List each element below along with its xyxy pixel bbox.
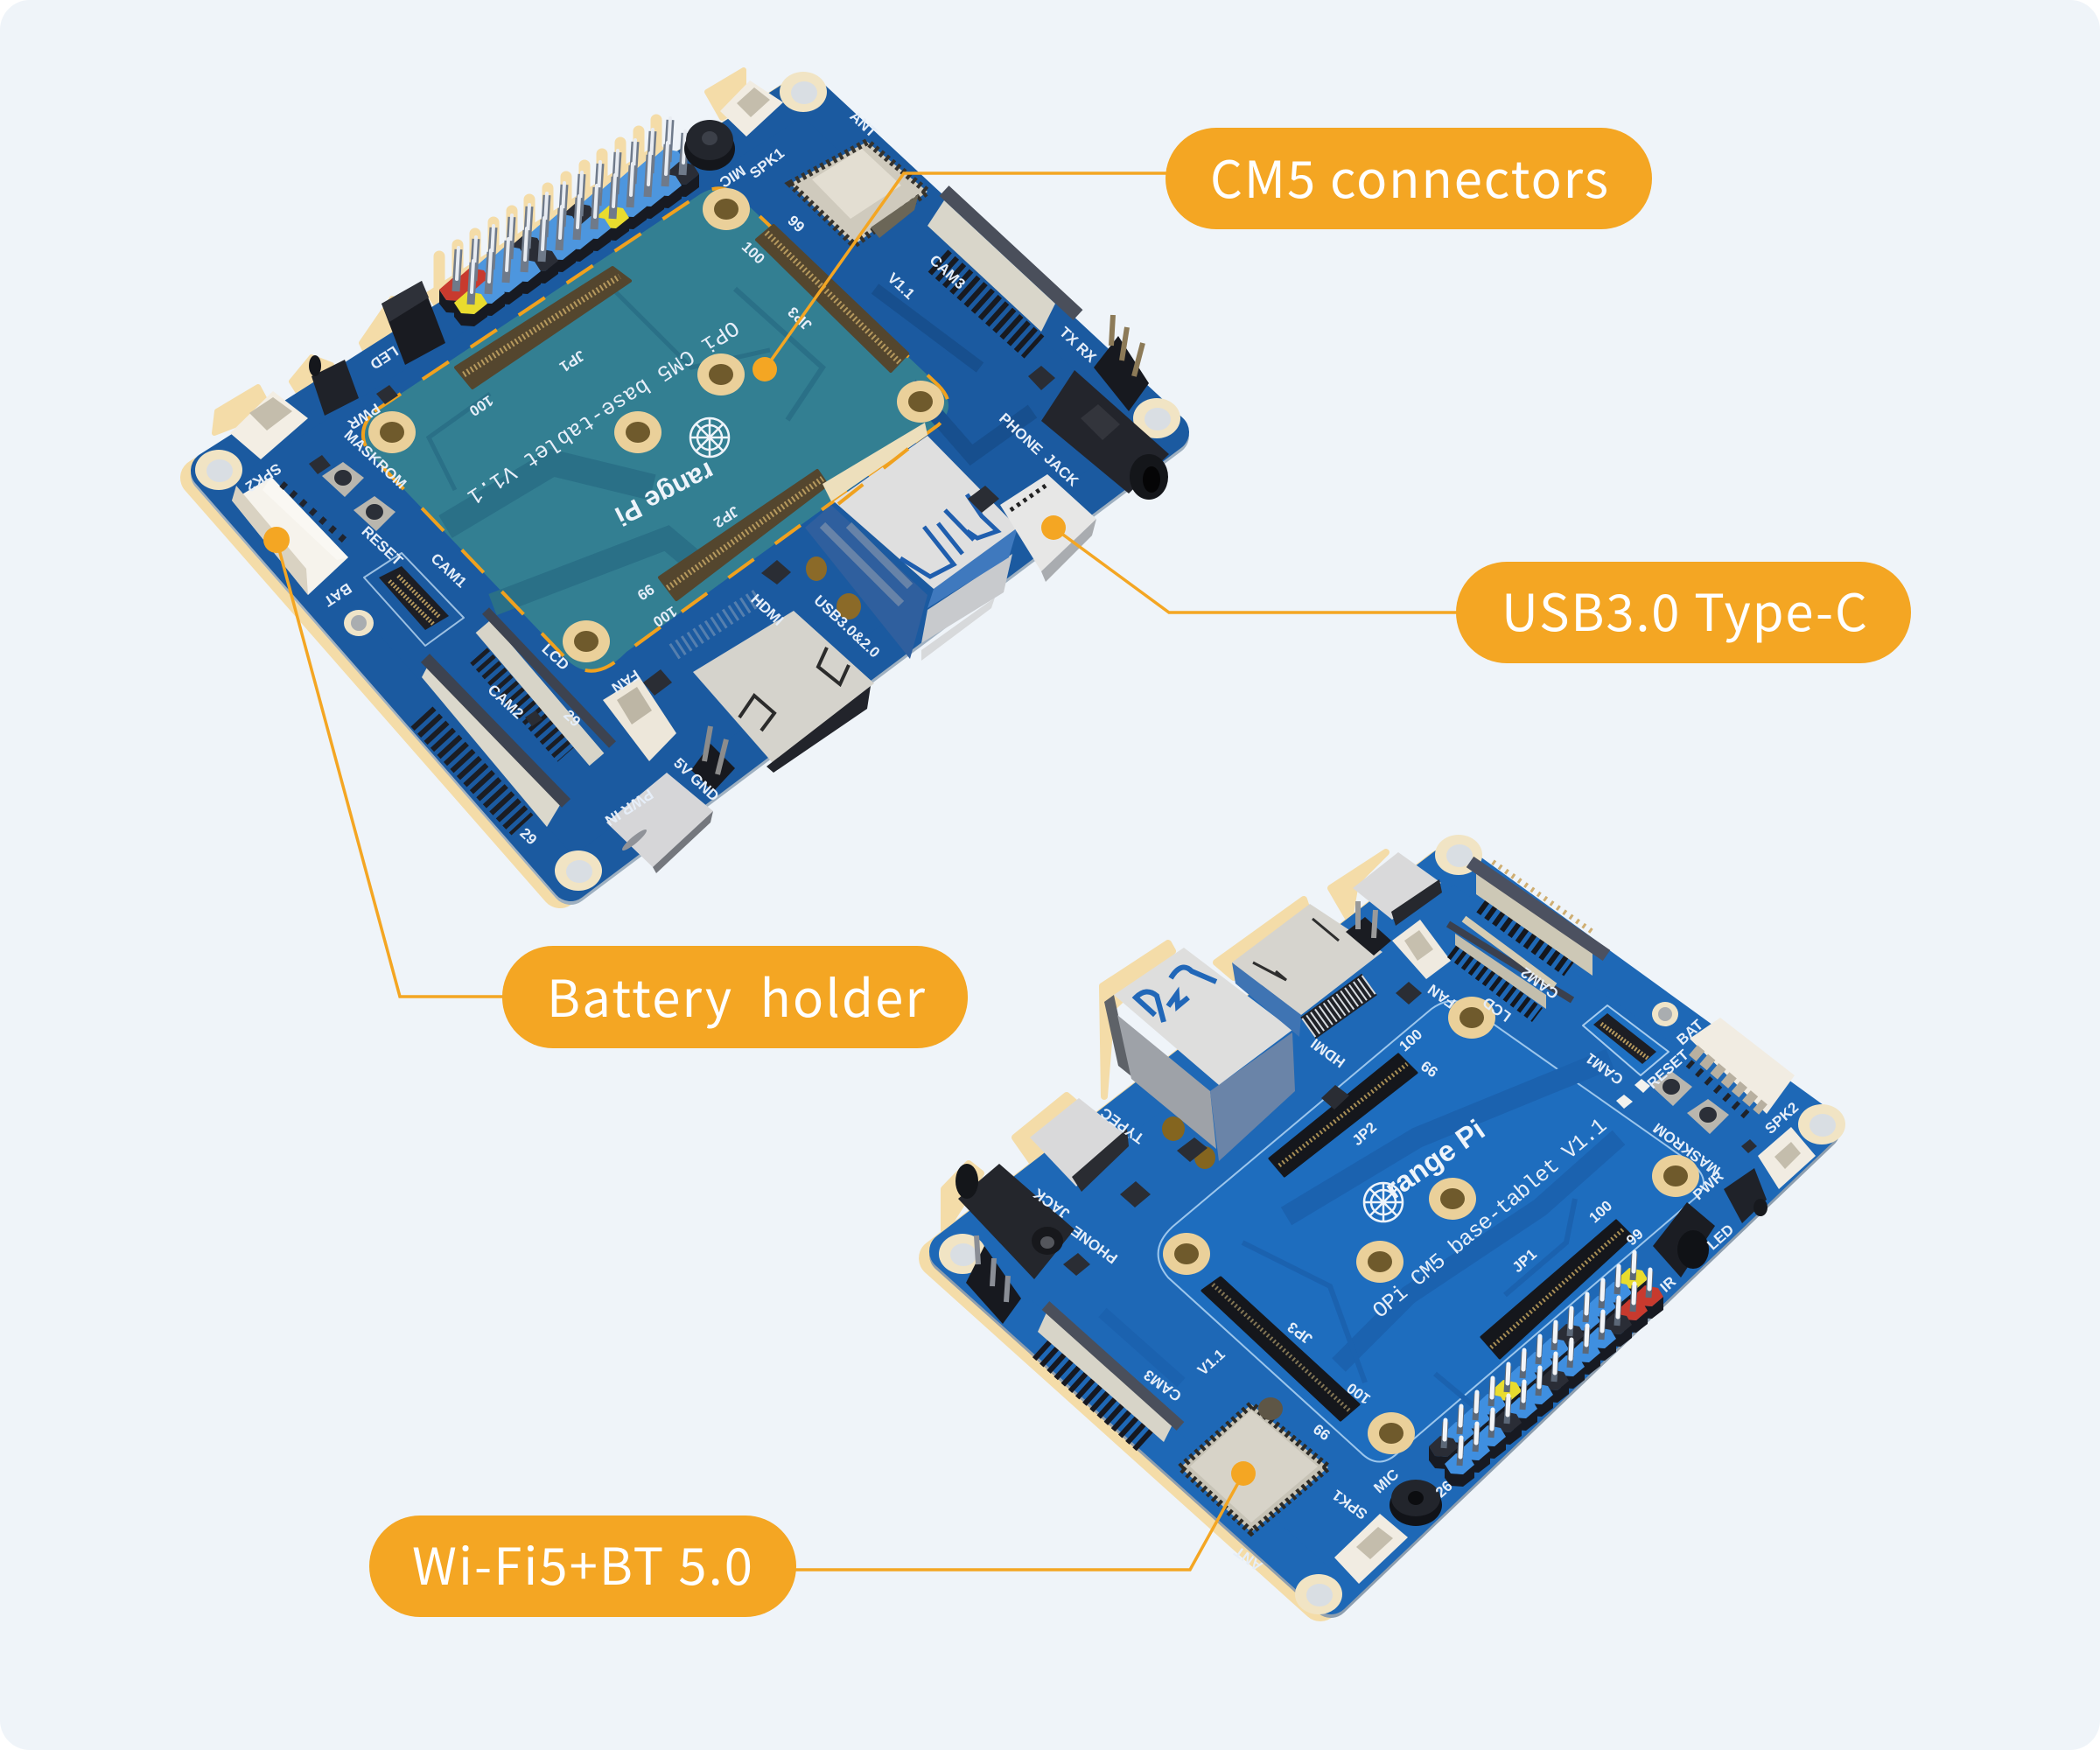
FAN connector: [1392, 920, 1451, 979]
board silk text: MASKROM: [1650, 1119, 1724, 1180]
board silk text: SPK1: [746, 145, 788, 182]
board silk text: LED: [1704, 1221, 1737, 1253]
USB 3.0 stack: [1104, 948, 1295, 1169]
CAM1 connector: [364, 553, 464, 646]
callout: CM5 connectors: [752, 128, 1652, 382]
marker dot: [263, 527, 290, 553]
board silk text: [1030, 964, 1802, 1574]
PCB bottom board: [948, 861, 1821, 1595]
USB Type-C power port: [606, 773, 713, 873]
dashed module outline: [363, 188, 948, 671]
Wi-Fi module: [1180, 1397, 1328, 1532]
board silk text: PWR: [1690, 1168, 1726, 1203]
pill: [369, 1516, 796, 1617]
speaker 2 connector: [1758, 1127, 1816, 1189]
LCD FFC connector: [1448, 919, 1572, 1015]
board silk text: CAM3: [927, 252, 969, 292]
board silk text: PHONE: [1068, 1222, 1121, 1267]
test pads: [1616, 1079, 1650, 1109]
CAM2 FFC connector: [422, 658, 566, 827]
board silk text: 99: [1311, 1420, 1334, 1444]
connector JP2: [1270, 1054, 1417, 1176]
board silk text: 99: [634, 580, 657, 604]
5V GND header: [691, 726, 735, 792]
board silk text: MIC: [717, 162, 748, 191]
board silk text: LCD: [538, 640, 572, 674]
board silk text: BAT: [320, 579, 354, 610]
5V GND header: [1346, 901, 1391, 956]
board silk text: TX RX: [1056, 324, 1100, 366]
label: Battery holder: [547, 958, 925, 1032]
board silk text: LED: [368, 342, 401, 373]
board silk text: JACK: [1030, 1185, 1073, 1222]
board silk text: 100: [650, 603, 680, 630]
buttons: [1650, 1071, 1729, 1134]
board silk text: 5V GND: [670, 754, 722, 805]
marker dot: [1041, 515, 1066, 540]
three pin header: [966, 1236, 1021, 1324]
module traces: [429, 289, 1032, 605]
board silk text: V1.1: [884, 270, 918, 303]
board silk text: 99: [784, 213, 808, 235]
USB 3.0 stack: [805, 423, 1018, 661]
board silk text: 100: [1396, 1026, 1425, 1054]
mounting holes: [939, 835, 1845, 1614]
board silk text: OPi CM5 base-tablet V1.1: [1368, 1113, 1613, 1324]
bottom board: Orange Pi CM5 base, bare PCB view: [938, 835, 1845, 1614]
speaker 1 connector: [720, 80, 783, 136]
power switch: [1724, 1168, 1768, 1223]
board silk text: TYPEC: [1097, 1104, 1147, 1147]
leader line: [1054, 528, 1461, 612]
board edge: [210, 96, 1170, 886]
board silk text: 100: [738, 238, 768, 268]
CAM1 connector: [1583, 1005, 1669, 1075]
board silk text: JACK: [1040, 450, 1082, 490]
pill: [1166, 128, 1652, 229]
marker dot: [1231, 1461, 1256, 1486]
board silk text: 100: [1344, 1379, 1374, 1407]
board silk text: PWR: [345, 400, 383, 432]
connector JP2: [660, 471, 827, 599]
connector JP1: [1481, 1221, 1632, 1358]
board silk text: BAT: [1673, 1016, 1707, 1048]
battery holder: [1689, 1018, 1795, 1118]
CAM3 FFC connector: [1038, 1306, 1180, 1444]
Wi-Fi module: [790, 142, 928, 245]
board silk text: SPK1: [1329, 1487, 1370, 1522]
leader line: [792, 1474, 1243, 1570]
HDMI port: [674, 595, 874, 773]
leader line: [276, 540, 508, 997]
callout: USB3.0 Type-C: [1041, 515, 1911, 663]
board silk text: 99: [1418, 1057, 1441, 1081]
label: Wi-Fi5+BT 5.0: [412, 1526, 752, 1600]
small ICs: [1063, 982, 1757, 1276]
connector JP3: [757, 226, 907, 371]
board silk text: PWR IN: [602, 786, 656, 829]
module keepout outline: [1158, 1001, 1704, 1462]
board silk text: CAM2: [485, 682, 527, 722]
IR receiver: [1653, 1202, 1715, 1278]
label: USB3.0 Type-C: [1502, 572, 1867, 646]
board silk text: IR: [1657, 1273, 1679, 1296]
pill: [502, 946, 968, 1048]
board silk text: HDMI: [747, 591, 787, 629]
battery holder: [232, 477, 350, 595]
board silk text: RESET: [359, 523, 406, 570]
board silk text: JP2: [710, 502, 742, 531]
Orange Pi logo: [610, 418, 729, 532]
mounting holes: [195, 72, 1180, 891]
board silk text: ANT: [1231, 1543, 1265, 1574]
Orange Pi logo: range Pi: [1378, 1113, 1490, 1205]
USB Type-C port: [1030, 1098, 1129, 1192]
buttons: [322, 462, 396, 531]
board silk text: SPK2: [1761, 1099, 1802, 1138]
board silk text: 29: [516, 825, 540, 848]
board silk text: CAM3: [1141, 1367, 1185, 1404]
callout: Battery holder: [263, 527, 968, 1048]
LCD FFC connector: [479, 611, 612, 760]
PCB top board: [210, 93, 1170, 882]
board silk text: ANT: [846, 108, 880, 141]
board silk text: FAN: [609, 666, 642, 696]
top board: Orange Pi CM5 base, top view with translucent module: [195, 70, 1180, 891]
GPIO pin header: [439, 118, 699, 326]
board silk text: OPi CM5 base-tablet V1.1: [462, 314, 743, 509]
FAN connector: [603, 677, 676, 761]
cream offset shadow of bottom board: [938, 852, 1810, 1602]
board silk text: CAM2: [1518, 964, 1562, 1002]
board silk text: 26: [1432, 1478, 1456, 1501]
GPIO pin header: [1429, 1252, 1663, 1487]
board silk text: HDMI: [1308, 1035, 1348, 1071]
callout: Wi-Fi5+BT 5.0: [369, 1461, 1256, 1617]
three pin header: [1094, 315, 1149, 411]
board silk text: 100: [466, 392, 496, 419]
board silk text: 100: [1586, 1197, 1615, 1226]
USB Type-C port: [1000, 474, 1096, 582]
board silk text: SPK2: [242, 460, 284, 495]
board silk text: 29: [560, 707, 584, 730]
power switch: [309, 355, 359, 416]
microphone: [684, 120, 735, 171]
board silk text: RESET: [1644, 1046, 1692, 1092]
cream offset shadow of top board: [200, 70, 1159, 889]
small ICs: [309, 366, 1055, 726]
board silk text: LCD: [1480, 993, 1514, 1025]
CAM3 FFC connector: [928, 191, 1078, 347]
speaker 2 connector: [230, 391, 308, 459]
board silk text: CAM1: [1583, 1050, 1627, 1088]
board silk text: JP1: [556, 346, 588, 375]
phone jack: [956, 1164, 1074, 1279]
marker dot: [752, 357, 777, 382]
connector JP3: [1202, 1278, 1359, 1420]
PCB traces: [1102, 1059, 1619, 1418]
translucent CM5 module area: [363, 188, 948, 671]
board silk text: CAM1: [428, 550, 470, 591]
microphone: [1390, 1480, 1442, 1526]
board silk text: [242, 108, 1100, 848]
board silk text: MASKROM: [340, 426, 410, 493]
board silk text: PHONE: [996, 410, 1046, 458]
IR receiver: [382, 281, 445, 365]
board edge: [948, 864, 1821, 1599]
Orange Pi logo: range Pi: [610, 456, 719, 532]
speaker 1 connector: [1334, 1514, 1408, 1584]
board silk text: JP2: [1349, 1119, 1380, 1149]
label: CM5 connectors: [1210, 139, 1608, 213]
phone jack: [1041, 370, 1169, 500]
board silk text: V1.1: [1194, 1346, 1228, 1379]
pill: [1456, 562, 1911, 663]
connector JP1: [456, 268, 630, 388]
board silk text: JP3: [1284, 1319, 1316, 1348]
board silk text: USB3.0&2.0: [810, 592, 883, 661]
CAM2 FFC connector: [1470, 862, 1606, 976]
USB Type-C power port: [1353, 852, 1442, 926]
board silk text: 99: [1623, 1226, 1647, 1249]
board silk text: JP1: [1509, 1246, 1540, 1276]
leader line: [765, 173, 1172, 369]
board silk text: FAN: [1424, 981, 1459, 1012]
board silk text: MIC: [1370, 1466, 1402, 1496]
HDMI port: [1232, 904, 1382, 1037]
board silk text: JP3: [785, 304, 816, 333]
